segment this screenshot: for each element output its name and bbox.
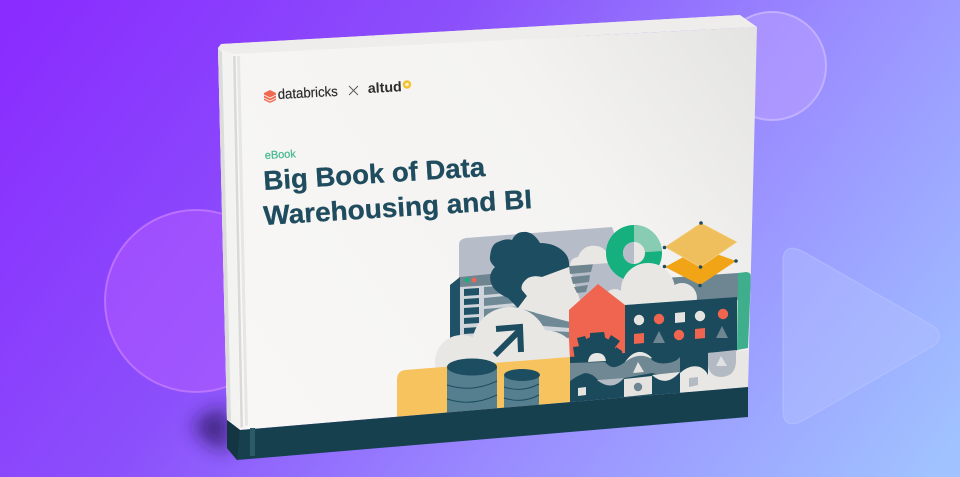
decorative circle: left: [105, 210, 287, 392]
light cloud over ring: [608, 263, 697, 305]
small cloud: [570, 246, 608, 266]
title: Warehousing and BI: [262, 184, 533, 231]
center white cloud: [435, 307, 570, 368]
title: [262, 152, 533, 231]
lower wave accents: [597, 378, 624, 386]
front cover: [218, 27, 757, 430]
small database: [504, 369, 540, 408]
book: [218, 15, 757, 460]
times mark: [349, 86, 358, 95]
red house: [569, 284, 625, 357]
large database: [447, 358, 497, 418]
decorative play triangle: [783, 248, 940, 424]
triangle on wave: [633, 362, 644, 373]
light square with circle: [624, 376, 652, 397]
logo: databricks and altudo: [264, 78, 410, 103]
title: Big Book of Data: [262, 152, 487, 196]
gray band behind cloud: [672, 273, 738, 300]
band spine shading: [227, 420, 240, 460]
window dots: [465, 278, 469, 282]
window title bar: [460, 274, 492, 287]
arrow: [495, 327, 521, 355]
gear: [573, 332, 622, 362]
gray tab: [689, 350, 736, 387]
top strip highlight: [218, 15, 757, 54]
altudo wordmark: altud: [367, 78, 402, 96]
wave highlight: [625, 352, 652, 362]
decorative circle: top right: [718, 12, 826, 120]
building symbols: [634, 309, 728, 344]
light lower right block: [680, 350, 748, 395]
back cover top edge: [221, 15, 740, 56]
green strip: [737, 272, 751, 350]
window body: [460, 285, 569, 340]
band groove: [250, 428, 255, 456]
yellow diamond lower: [666, 254, 734, 284]
navy building: [569, 297, 737, 410]
gray back panel: [459, 227, 640, 300]
small light square: [578, 387, 586, 396]
light crescent: [652, 372, 680, 381]
dark base band: [227, 387, 748, 460]
light swoosh: [518, 267, 580, 322]
illustration: [397, 221, 751, 418]
book shadow: [192, 408, 230, 452]
databricks wordmark: databricks: [277, 83, 338, 102]
green ring chart: [606, 225, 662, 281]
stripes funnel: [569, 264, 593, 293]
window side: [450, 277, 460, 338]
window rows: [464, 288, 479, 334]
icon: databricks mark: [264, 90, 276, 103]
yellow panel: [397, 357, 570, 418]
eBook label: eBook: [264, 148, 297, 162]
window: [450, 274, 569, 340]
wave band: [569, 356, 680, 382]
spine: [218, 48, 248, 430]
yellow diamond upper: [665, 223, 737, 267]
dark cloud: [490, 232, 569, 308]
altudo yellow dot: [404, 82, 410, 88]
diamond handles: [663, 221, 738, 287]
